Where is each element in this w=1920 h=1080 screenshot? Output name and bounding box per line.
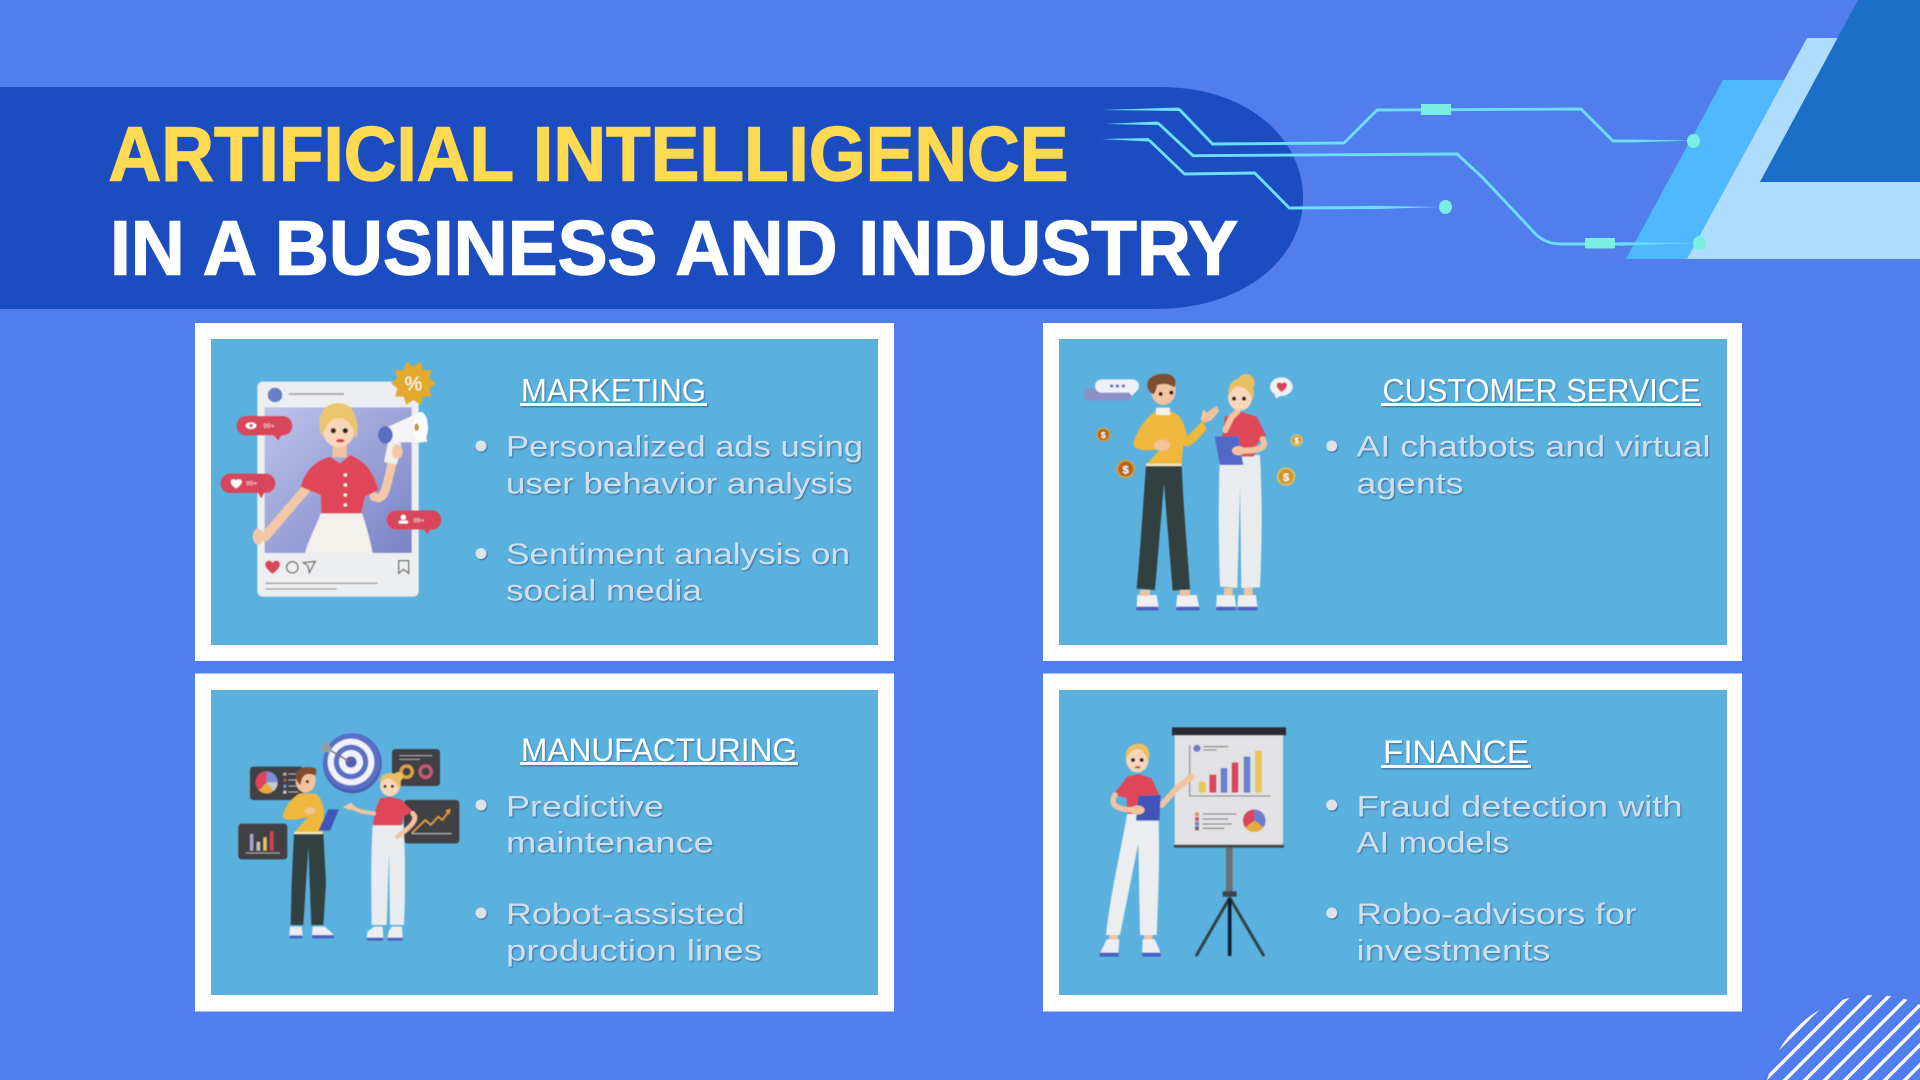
text: marketing bullets: [476, 431, 863, 608]
text: marketing bullets: user behavior analysis: [506, 467, 853, 500]
heading: manufacturing: MANUFACTURING: [521, 732, 797, 768]
icon: team with target and charts: [238, 733, 459, 941]
icon: social media post with woman and megaphone: %: [404, 374, 422, 396]
decorative hatch circle: [1767, 995, 1920, 1080]
text: finance bullets: investments: [1356, 935, 1550, 968]
text: manufacturing bullets: Predictive: [506, 791, 664, 824]
icon: man and woman talking: $: [1123, 464, 1130, 476]
text: customer service bullets: [1326, 431, 1710, 500]
title line 1: ARTIFICIAL INTELLIGENCE: [108, 112, 1068, 198]
icon: social media post with woman and megaphone: 99+: [413, 517, 425, 524]
icon: man and woman talking: $: [1294, 436, 1299, 445]
icon: social media post with woman and megaphone: 99+: [263, 423, 275, 430]
icon: man and woman talking: $: [1283, 472, 1290, 484]
heading: finance: FINANCE: [1383, 734, 1529, 770]
text: manufacturing bullets: production lines: [506, 935, 762, 968]
text: manufacturing bullets: [476, 791, 762, 968]
heading: customer service: CUSTOMER SERVICE: [1382, 373, 1700, 409]
text: marketing bullets: social media: [506, 575, 702, 608]
icon: social media post with woman and megaphone: 99+: [246, 481, 257, 488]
circuit lines: [1101, 104, 1706, 250]
icon: social media post with woman and megaphone: [221, 362, 441, 597]
text: marketing bullets: Personalized ads using: [506, 431, 863, 464]
icon: man and woman talking: $: [1101, 430, 1106, 440]
text: customer service bullets: agents: [1356, 467, 1464, 500]
icon: man and woman talking: [1084, 374, 1302, 610]
text: finance bullets: Fraud detection with: [1356, 791, 1682, 824]
text: finance bullets: AI models: [1356, 827, 1510, 860]
title banner: [0, 87, 1303, 309]
text: customer service bullets: AI chatbots and virtual: [1356, 431, 1710, 464]
text: finance bullets: Robo-advisors for: [1356, 898, 1637, 931]
icon: woman presenting chart board: [1099, 727, 1286, 957]
decorative corner shapes: [1626, 0, 1920, 259]
title line 2: IN A BUSINESS AND INDUSTRY: [110, 206, 1238, 292]
panel: manufacturing: [195, 674, 894, 1012]
title: [108, 112, 1238, 292]
text: marketing bullets: Sentiment analysis on: [506, 538, 850, 571]
text: manufacturing bullets: Robot-assisted: [506, 898, 745, 931]
text: manufacturing bullets: maintenance: [506, 827, 714, 860]
panel: customer service: [1043, 323, 1742, 661]
panel: finance: [1043, 674, 1742, 1012]
heading: marketing: MARKETING: [521, 373, 706, 409]
panel: marketing: [195, 323, 894, 661]
text: finance bullets: [1326, 791, 1682, 968]
